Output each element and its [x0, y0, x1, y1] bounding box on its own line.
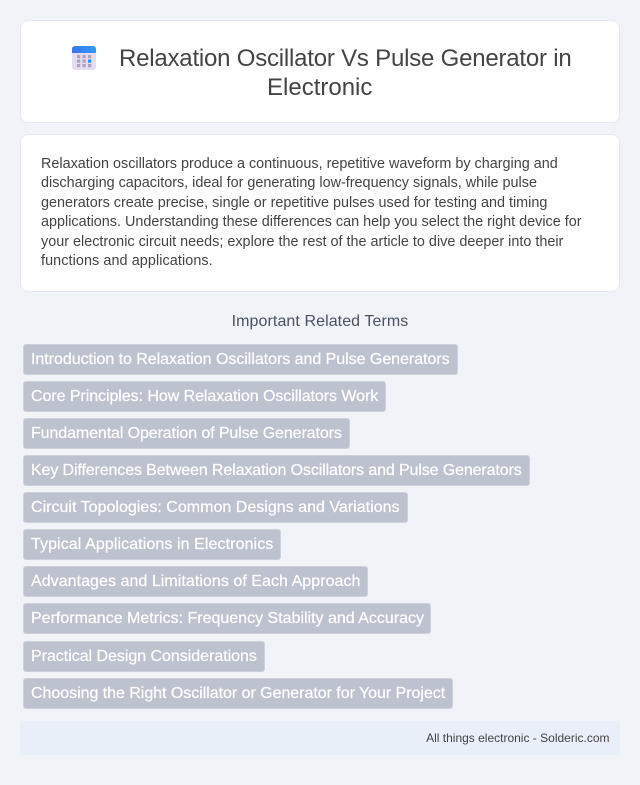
- tag 8: [23, 603, 431, 634]
- text block: description: [41, 156, 582, 269]
- tag 10: [23, 678, 453, 709]
- title: [119, 45, 572, 101]
- text block: description: functions and applications.: [41, 253, 213, 269]
- panel: title card: [20, 20, 620, 123]
- text block: description: generators create precise, single or repetitive pulses used for testing and timing: [41, 195, 547, 211]
- text block: description: your electronic circuit needs; explore the rest of the article to dive deeper into their: [41, 234, 563, 250]
- text block: description: discharging capacitors, ideal for generating low-frequency signals, while pulse: [41, 175, 537, 191]
- tag 3: [23, 418, 350, 449]
- text block: description: applications. Understanding these differences can help you select the right device for: [41, 214, 582, 230]
- panel: description: [20, 134, 620, 292]
- tag 4: [23, 455, 530, 486]
- title: Electronic: [267, 74, 372, 101]
- tag 3: Fundamental Operation of Pulse Generators: [31, 425, 342, 442]
- tag 10: Choosing the Right Oscillator or Generator for Your Project: [31, 685, 445, 702]
- heading: important related terms: Important Related Terms: [232, 313, 408, 330]
- tag 4: Key Differences Between Relaxation Oscillators and Pulse Generators: [31, 462, 522, 479]
- footer: [20, 721, 620, 755]
- tag 6: Typical Applications in Electronics: [31, 536, 273, 553]
- tag 6: [23, 529, 281, 560]
- tag 7: Advantages and Limitations of Each Approach: [31, 573, 360, 590]
- list: related terms: [23, 344, 530, 709]
- tag 1: [23, 344, 458, 375]
- text block: description: Relaxation oscillators produce a continuous, repetitive waveform by charging and: [41, 156, 558, 172]
- tag 2: [23, 381, 386, 412]
- tag 5: Circuit Topologies: Common Designs and Variations: [31, 499, 400, 516]
- tag 9: Practical Design Considerations: [31, 648, 257, 665]
- tag 2: Core Principles: How Relaxation Oscillators Work: [31, 388, 378, 405]
- tag 5: [23, 492, 408, 523]
- tag 1: Introduction to Relaxation Oscillators and Pulse Generators: [31, 351, 450, 368]
- tag 9: [23, 641, 265, 672]
- tag 7: [23, 566, 368, 597]
- icon: calendar: [72, 46, 96, 70]
- tag 8: Performance Metrics: Frequency Stability and Accuracy: [31, 610, 424, 627]
- footer: All things electronic - Solderic.com: [426, 731, 610, 745]
- title: Relaxation Oscillator Vs Pulse Generator in: [119, 45, 572, 72]
